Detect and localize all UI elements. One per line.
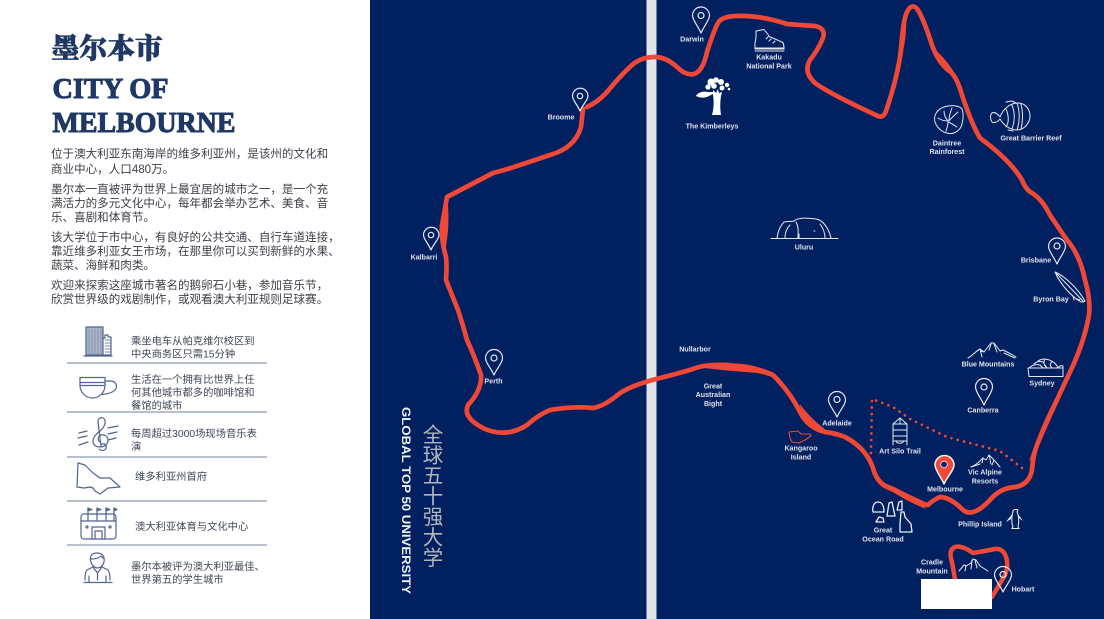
label: Blue Mountains: Blue Mountains [962, 360, 1014, 368]
text block: introduction paragraphs: 蔬菜、海鲜和肉类。 [51, 258, 155, 272]
label: Sydney: Sydney [1029, 379, 1055, 387]
text: live music: 演 [131, 440, 141, 453]
icon: Kangaroo Island outline [789, 431, 811, 443]
list: city facts [67, 327, 267, 586]
title: English heading: MELBOURNE [52, 107, 236, 139]
label: Broome: Broome [548, 113, 574, 121]
text block: introduction paragraphs: 乐、喜剧和体育节。 [51, 210, 155, 224]
text: student city [131, 560, 265, 586]
icon: Uluru [771, 218, 838, 238]
text: vertical Chinese slogan: 全球五十强大学 [418, 424, 448, 568]
label: Kangaroo Island: Kangaroo [784, 444, 818, 452]
icon: surfboard [1055, 272, 1085, 302]
label: Kalbarri: Kalbarri [411, 253, 437, 261]
label: Daintree Rainforest [929, 139, 965, 156]
text block: introduction paragraphs: 位于澳大利亚东南海岸的维多利亚州，是该州的文化和 [51, 146, 328, 160]
chart: Tasmania coastline [951, 547, 1007, 597]
label: Daintree Rainforest: Daintree [933, 139, 961, 147]
text block: introduction paragraphs: 商业中心，人口480万。 [51, 162, 174, 176]
label: Cradle Mountain: Mountain [916, 567, 948, 575]
icon: Melbourne pin [935, 456, 954, 484]
text: live music: 每周超过3000场现场音乐表 [131, 427, 257, 440]
label: Great Australian Bight: Australian [696, 391, 730, 399]
icon: Kalbarri pin [424, 227, 439, 250]
label: Vic Alpine Resorts: Vic Alpine [968, 468, 1002, 476]
text: live music [131, 427, 257, 453]
text: vertical English slogan: GLOBAL TOP 50 UNIVERSITY [399, 407, 411, 594]
text: student city: 世界第五的学生城市 [131, 573, 224, 586]
icon: Brisbane pin [1048, 238, 1066, 264]
icon: clownfish [990, 101, 1030, 131]
label: Great Australian Bight: Bight [704, 400, 723, 408]
text: state capital: 维多利亚州首府 [135, 470, 207, 483]
label: Vic Alpine Resorts [968, 468, 1002, 485]
icon: Perth pin [486, 350, 502, 375]
icon: Hobart pin [994, 566, 1012, 592]
text block: introduction paragraphs [51, 146, 340, 306]
label: Phillip Island: Phillip Island [958, 520, 1002, 528]
label: Great Ocean Road: Great [874, 526, 893, 534]
text block: introduction paragraphs: 靠近维多利亚女王市场，在那里你可以买到新鲜的水果、 [51, 244, 340, 258]
route: Art Silo Trail dotted line [871, 399, 1026, 471]
label: Adelaide: Adelaide [822, 419, 852, 427]
label: Perth: Perth [484, 377, 503, 385]
label: Nullarbor: Nullarbor [679, 345, 711, 353]
label: Vic Alpine Resorts: Resorts [972, 477, 998, 485]
label: Uluru: Uluru [795, 243, 813, 251]
label: Great Australian Bight: Great [704, 382, 723, 390]
title: Chinese heading: 墨尔本市 [52, 33, 163, 65]
icon: Canberra pin [976, 378, 992, 405]
text: tram to CBD [131, 334, 255, 360]
label: Kakadu National Park: Kakadu [756, 54, 782, 62]
icon: penguin [1006, 509, 1023, 528]
label: Cradle Mountain [916, 558, 948, 575]
text block: introduction paragraphs: 墨尔本一直被评为世界上最宜居的城市之一，是一个充 [51, 182, 329, 196]
text: student city: 墨尔本被评为澳大利亚最佳、 [131, 560, 265, 573]
icon: daintree leaf [935, 106, 963, 134]
chart: Australia coastline route [442, 6, 1089, 512]
icon: office buildings [84, 327, 112, 356]
label: Art Silo Trail: Art Silo Trail [879, 447, 921, 455]
icon: Blue Mountains [968, 343, 1016, 358]
label: Daintree Rainforest: Rainforest [929, 148, 965, 156]
text: cafes: 生活在一个拥有比世界上任 [131, 373, 255, 386]
text block: introduction paragraphs: 欣赏世界级的戏剧制作，或观看澳大利亚规则足球赛。 [51, 292, 328, 306]
label: Darwin: Darwin [680, 36, 704, 44]
icon: silo [893, 418, 907, 445]
icon: Cradle Mountain peaks [959, 559, 988, 571]
label: Brisbane: Brisbane [1021, 256, 1051, 264]
icon: Great Ocean Road rocks [873, 501, 912, 532]
icon: Vic alpine mountains [971, 455, 1000, 467]
text: cafes: 何其他城市都多的咖啡馆和 [131, 386, 255, 399]
label: Byron Bay: Byron Bay [1033, 295, 1069, 303]
icon: Sydney Opera House [1028, 359, 1063, 376]
icon: boab tree [696, 77, 730, 115]
label: The Kimberleys: The Kimberleys [686, 122, 738, 130]
icon: hiking boot [755, 30, 784, 51]
label: Canberra: Canberra [967, 406, 999, 414]
icon: Broome pin [572, 88, 588, 111]
panel: centre divider [646, 0, 656, 619]
text: tram to CBD: 中央商务区只需15分钟 [131, 348, 235, 360]
label: Hobart: Hobart [1012, 585, 1035, 593]
text block: introduction paragraphs: 满活力的多元文化中心，每年都会举办艺术、美食、音 [51, 196, 328, 210]
text: cafes [131, 373, 255, 412]
icon: stadium [81, 508, 117, 539]
icon: Adelaide pin [828, 392, 846, 417]
label: Great Ocean Road [862, 526, 904, 543]
block: white redaction box [921, 579, 992, 609]
text: sports and culture: 澳大利亚体育与文化中心 [135, 520, 248, 533]
label: Melbourne: Melbourne [927, 485, 963, 493]
text block: introduction paragraphs: 该大学位于市中心，有良好的公共交通、自行车道连接， [51, 230, 340, 244]
label: Kakadu National Park [746, 54, 792, 70]
label: Cradle Mountain: Cradle [921, 558, 943, 566]
icon: coffee cup [80, 378, 116, 398]
label: Kangaroo Island [784, 444, 818, 461]
icon: treble clef with motion lines [78, 418, 118, 450]
label: Great Australian Bight [696, 382, 730, 408]
label: Great Barrier Reef: Great Barrier Reef [1000, 134, 1062, 142]
title: English heading [52, 73, 236, 139]
icon: Victoria state outline [77, 463, 120, 494]
title: English heading: CITY OF [52, 73, 168, 105]
text block: introduction paragraphs: 欢迎来探索这座城市著名的鹅卵石小巷，参加音乐节， [51, 278, 328, 292]
label: Kakadu National Park: National Park [746, 62, 792, 70]
panel: map background [370, 0, 1104, 619]
label: Great Ocean Road: Ocean Road [862, 535, 904, 543]
icon: Darwin pin [692, 7, 710, 33]
icon: student [84, 553, 112, 582]
text: cafes: 餐馆的城市 [131, 399, 182, 412]
text: tram to CBD: 乘坐电车从帕克维尔校区到 [131, 334, 255, 348]
label: Kangaroo Island: Island [791, 453, 811, 461]
